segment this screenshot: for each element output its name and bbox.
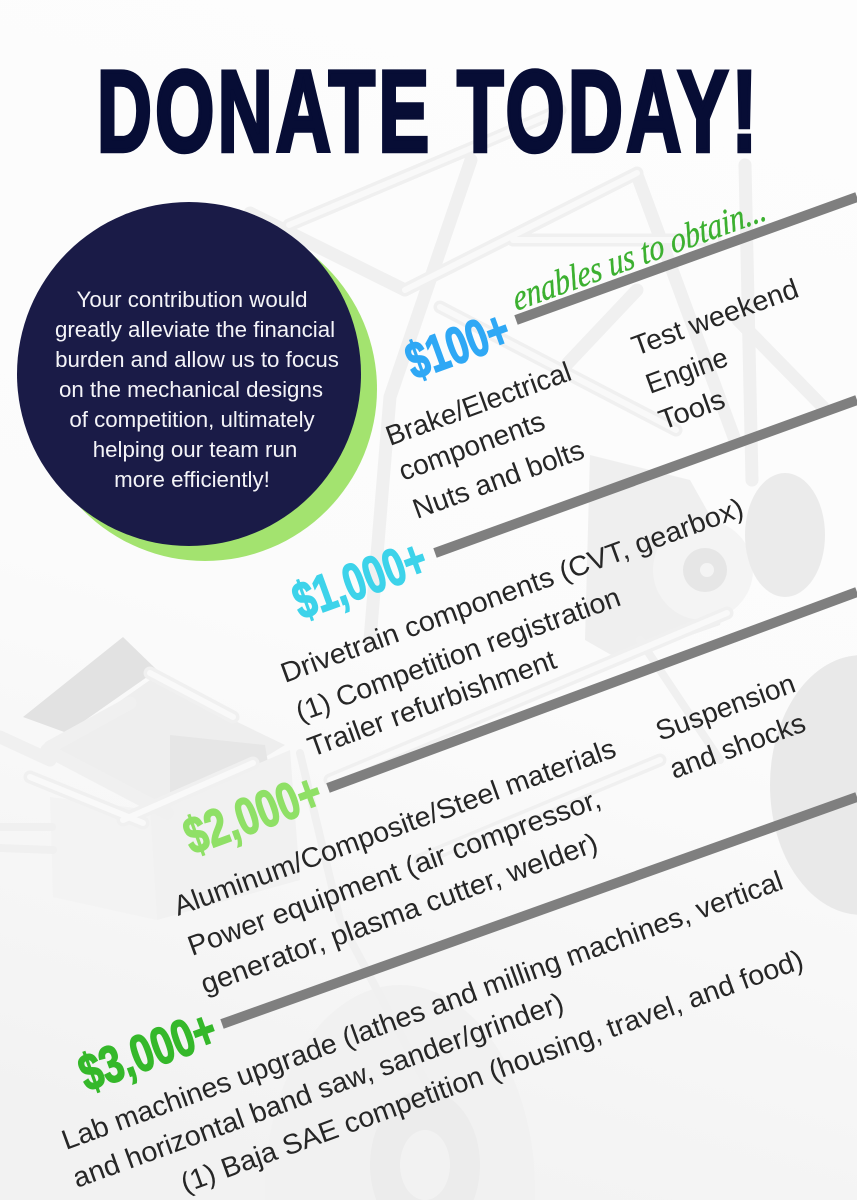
tier: $100+: Tools [654,383,729,436]
tier: $2,000+: and shocks [665,707,809,785]
tier: $100+: $100+ [398,301,518,391]
callout: contribution circle: Your contribution would [77,287,307,312]
tier: $100+: components [394,405,549,487]
divider lines [222,197,857,1024]
tier: $100+ [381,273,802,525]
callout: contribution circle: on the mechanical designs [59,377,323,402]
callout: contribution circle: of competition, ultimately [69,407,316,432]
tier: $100+: Nuts and bolts [408,434,588,525]
tier: $1,000+: Trailer refurbishment [303,644,560,763]
tier: $1,000+: Drivetrain components (CVT, gearbox) [276,492,748,689]
tier: $3,000+: (1) Baja SAE competition (housing, travel, and food) [176,944,807,1199]
background: faded buggy frame tubes [0,110,823,1090]
tier: $2,000+: Aluminum/Composite/Steel materials [169,732,620,922]
tier: $100+: Brake/Electrical [381,356,575,452]
tier: $2,000+: Power equipment (air compressor, [183,783,605,962]
tier: $2,000+: generator, plasma cutter, welder) [196,827,602,1000]
tier: $3,000+: Lab machines upgrade (lathes and milling machines, vertical [57,865,787,1156]
background: engine block [585,455,825,660]
tier: $1,000+ [276,492,748,763]
tier: $2,000+: $2,000+ [176,763,330,866]
callout: contribution circle: more efficiently! [114,467,270,492]
background: wheels [265,655,857,1200]
tier: $1,000+: (1) Competition registration [291,581,624,728]
tier: $1,000+: $1,000+ [285,530,435,631]
tier: $100+: Engine [641,341,732,400]
background: rear box [23,637,300,920]
title: DONATE TODAY! [97,47,757,176]
callout: contribution circle: greatly alleviate the financial [55,317,335,342]
background: tube highlights [30,110,727,860]
callout: contribution circle [17,202,377,561]
tier: $3,000+: and horizontal band saw, sander/grinder) [68,987,568,1194]
tier: $2,000+: Suspension [651,668,799,747]
tier: $2,000+ [169,668,809,1000]
script: enables us to obtain: enables us to obtain... [509,188,770,319]
callout: contribution circle: helping our team run [93,437,297,462]
tier: $100+: Test weekend [627,273,802,362]
callout: contribution circle: burden and allow us to focus [55,347,339,372]
tier: $3,000+: $3,000+ [71,1000,225,1103]
